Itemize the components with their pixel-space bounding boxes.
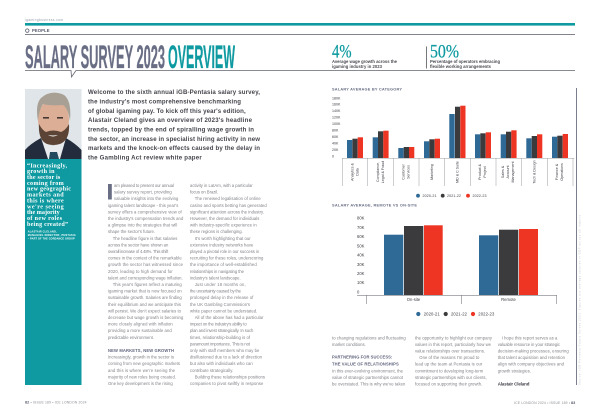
body text column 1: across the sector have shown an xyxy=(108,242,169,247)
y axis labels: 60K xyxy=(332,135,339,139)
body text column 1: their equilibrium and we anticipate this xyxy=(108,302,181,307)
intro paragraph: markets and the knock-on effects caused by the delay in xyxy=(88,145,260,152)
y axis labels: 50K xyxy=(357,243,365,248)
body text column 2: Just under 18 months on, xyxy=(195,282,246,287)
body text column 1: overall increase of 4.48%. This shift xyxy=(108,249,169,254)
y axis labels: 120K xyxy=(332,116,341,120)
y axis labels: 20K xyxy=(357,271,365,276)
stat: 50% flexible working xyxy=(426,42,500,69)
y axis labels: 180K xyxy=(332,96,341,100)
y axis labels xyxy=(357,215,365,294)
y axis labels: 0 xyxy=(357,290,360,294)
x axis labels: Remote xyxy=(501,297,516,302)
body text column 3: market conditions. xyxy=(332,342,366,347)
body text column 2: only with staff members who may be xyxy=(190,348,260,353)
stat: 4% wage growth: igaming industry in 2023 xyxy=(332,64,383,69)
footer: right folio: 83 xyxy=(571,401,575,405)
body text column 2: with industry-specific experience in xyxy=(190,223,257,228)
body text column 4: the opportunity to highlight our company xyxy=(415,335,493,340)
body text column 1: a glimpse into the strategies that will xyxy=(108,223,177,228)
title rule with speech-bubble notch xyxy=(25,70,575,77)
bars: on-site xyxy=(384,225,443,295)
category labels: Compliance, xyxy=(376,162,380,182)
legend xyxy=(416,194,486,198)
body text column 1: igaming market that is now focused on xyxy=(108,289,182,294)
y axis labels: 70K xyxy=(357,225,365,230)
body text column 2: played a pivotal role in our success in xyxy=(190,249,260,254)
body text column 1: providing a more sustainable and xyxy=(108,328,172,333)
body text column 5 with byline: that talent acquisition and retention xyxy=(498,355,566,360)
body text column 4: focused on supporting their growth. xyxy=(415,381,482,386)
stat: 50% flexible working: Percentage of operators embracing xyxy=(430,59,500,64)
body text column 1: sustainable growth. Salaries are finding xyxy=(108,295,182,300)
category labels: MD & C Suite xyxy=(456,161,460,183)
body text column 2: All of the above has had a particular xyxy=(195,315,264,320)
quote text: the majority xyxy=(27,210,60,216)
quote attribution xyxy=(28,231,76,240)
body text column 1: The headline figure is that salaries xyxy=(113,236,177,241)
body text column 3: be overstated. This is why we've taken xyxy=(332,381,406,386)
body text column 2: industry's talent landscape. xyxy=(190,275,241,280)
body text column 2: the uncertainty caused by the xyxy=(190,289,242,294)
body text column 2: extensive industry networks have xyxy=(190,242,254,247)
body text column 4 xyxy=(415,335,493,386)
y axis labels: 0 xyxy=(332,154,334,158)
chart title: SALARY AVERAGE BY CATEGORY xyxy=(332,86,402,92)
legend: 2020-21 xyxy=(422,194,436,198)
quote attribution: ALASTAIR CLELAND, xyxy=(28,231,57,234)
body text column 2: relationships in navigating the xyxy=(190,269,245,274)
body text column 1: salary survey report, providing xyxy=(114,190,172,195)
quote attribution: MANAGING DIRECTOR, PENTASIA xyxy=(28,234,76,237)
body text column 5 with byline: align with company objectives and xyxy=(498,362,565,367)
body text column 3: PARTNERING FOR SUCCESS: xyxy=(332,355,392,360)
body text column 2: It's worth highlighting that our xyxy=(195,236,251,241)
body text column 4: value relationships over transactions. xyxy=(415,348,485,354)
body text column 2: paramount importance. This is not xyxy=(190,341,251,346)
intro paragraph: the sector, an increase in specialist hiring activity in new xyxy=(88,136,260,143)
portrait photo xyxy=(25,89,82,159)
right margin rule xyxy=(575,88,578,385)
header: website, teal bar and section tag: PEOPLE xyxy=(32,28,50,33)
quote text: this is where xyxy=(27,198,64,204)
body text column 2: the importance of well-established xyxy=(190,262,257,267)
body text column 1: One key development is the rising xyxy=(108,381,173,386)
body text column 1: shape the sector's future. xyxy=(108,229,155,234)
chart title: SALARY AVERAGE, REMOTE VS ON-SITE xyxy=(332,202,417,208)
intro paragraph: the Gambling Act review white paper xyxy=(88,154,202,162)
chart: salary average by category xyxy=(332,86,574,198)
y axis labels: 140K xyxy=(332,109,341,113)
body text column 2: these regions is challenging. xyxy=(190,229,243,234)
body text column 1: the industry's compensation trends and xyxy=(108,216,184,221)
body text column 2: but also with individuals who can xyxy=(190,361,253,366)
legend xyxy=(416,312,495,316)
quote text: of new roles xyxy=(27,216,63,222)
category labels: Account xyxy=(506,166,510,178)
stat: 4% wage growth: 4% xyxy=(332,42,352,62)
y axis labels: 80K xyxy=(357,215,365,220)
body text column 4: strategic partnerships with our clients, xyxy=(415,375,487,380)
body text column 1: will persist. We don't expect salaries to xyxy=(108,308,182,313)
quote attribution: – PART OF THE CORDANCE GROUP xyxy=(28,237,75,240)
y axis labels: 40K xyxy=(332,141,339,145)
body text column 5 with byline: Alastair Cleland xyxy=(498,381,530,386)
body text column 1: Increasingly, growth in the sector is xyxy=(108,355,174,360)
body text column 1: valuable insights into the evolving xyxy=(114,196,179,201)
body text column 1: am pleased to present our annual xyxy=(114,183,174,188)
intro paragraph: trends, topped by the end of spiralling wage growth in xyxy=(88,126,254,134)
body text column 2: white paper cannot be understated. xyxy=(190,308,257,313)
category labels xyxy=(350,160,564,184)
x axis labels: On-site xyxy=(407,297,421,302)
quote text: new geographic xyxy=(27,187,71,193)
intro paragraph: the industry's most comprehensive benchmarking xyxy=(88,98,241,106)
body text column 1: comes in the context of the remarkable xyxy=(108,256,182,261)
body text column 1 xyxy=(108,183,184,386)
body text column 1: and this is where we're seeing the xyxy=(108,368,176,373)
panel: pull quote xyxy=(25,159,82,385)
quote text: the sector is xyxy=(27,175,61,181)
title xyxy=(25,39,235,75)
intro paragraph: of global igaming pay. To kick off this year's edition, xyxy=(88,108,246,115)
body text column 2: plan and invest strategically. In such xyxy=(190,328,254,333)
x axis and ticks xyxy=(342,158,574,186)
quote text xyxy=(27,163,71,228)
text: OVERVIEW xyxy=(168,39,235,75)
body text column 4: lead up the team at Pentasia is our xyxy=(415,362,483,367)
body text column 2: Building these relationships positions xyxy=(195,374,265,379)
quote text: we're seeing xyxy=(27,204,64,210)
y axis labels: 40K xyxy=(357,252,365,258)
body text column 2: casino and sports betting has generated xyxy=(190,203,267,208)
title: SALARY SURVEY 2023 xyxy=(25,39,165,75)
footer: left folio: • ISSUE 189 • ICE LONDON 2024 xyxy=(30,400,87,404)
drop cap I xyxy=(108,184,112,200)
category labels: Management xyxy=(511,162,515,182)
body text column 2: focus on Brazil. xyxy=(190,190,218,195)
body text column 3: value of strategic partnerships cannot xyxy=(332,375,404,380)
y axis labels: 80K xyxy=(332,128,339,132)
body text column 1: predictable environment. xyxy=(108,335,154,340)
category labels: Sales & xyxy=(501,165,505,178)
quote text: being created” xyxy=(27,222,68,228)
body text column 1: talent and corresponding wage inflation. xyxy=(108,275,183,280)
body text column 5 with byline: I hope this report serves as a xyxy=(502,335,558,340)
body text column 2: significant attention across the industry. xyxy=(190,209,264,214)
body text column 2: However, the demand for individuals xyxy=(190,216,259,221)
legend: 2022-23 xyxy=(472,194,486,198)
body text column 5 with byline xyxy=(498,335,569,386)
body text column 2: The renewed legalisation of online xyxy=(195,196,261,201)
body text column 3: THE VALUE OF RELATIONSHIPS xyxy=(332,361,399,366)
bars: remote xyxy=(479,229,538,295)
body text column 2: activity in LatAm, with a particular xyxy=(190,183,253,188)
quote text: coming from xyxy=(27,181,64,187)
y axis labels: 10K xyxy=(357,280,365,285)
category labels: Customer xyxy=(402,163,406,180)
body text column 1: igaming talent landscape - this year's xyxy=(108,203,178,208)
body text column 1: growth the sector has witnessed since xyxy=(108,262,184,267)
quote text: growth in xyxy=(27,169,55,175)
stat: 4% wage growth: Average wage growth across the xyxy=(332,59,398,64)
y axis labels: 30K xyxy=(357,262,365,267)
category labels: Analytics & xyxy=(350,163,354,181)
chart: salary average, remote vs on-site xyxy=(332,202,557,316)
stat: 4% wage growth xyxy=(332,42,398,69)
body text column 4: commitment to developing long-term xyxy=(415,368,484,373)
intro paragraph: Alastair Cleland gives an overview of 2023's headline xyxy=(88,117,253,124)
body text column 2: contribute strategically. xyxy=(190,368,233,373)
body text column 5 with byline: valuable resource in your strategic xyxy=(498,342,560,347)
body text column 2: prolonged delay in the release of xyxy=(190,295,254,300)
body text column 1: more closely aligned with inflation xyxy=(108,322,173,327)
category labels: Legal & Fraud xyxy=(381,161,385,183)
category labels: Data xyxy=(356,168,360,176)
body text column 1: majority of new roles being created. xyxy=(108,374,176,379)
body text column 1: survey offers a comprehensive view of xyxy=(108,209,183,214)
intro paragraph: Welcome to the sixth annual iGB-Pentasia salary survey, xyxy=(88,89,260,96)
category labels: Operations xyxy=(560,163,564,181)
category labels: Product & xyxy=(478,164,482,180)
body text column 4: One of the reasons I'm proud to xyxy=(419,355,480,360)
category labels: Tech & Design xyxy=(532,160,536,184)
quote text: markets and xyxy=(27,192,64,198)
x axis labels xyxy=(407,297,516,302)
legend: 2021-22 xyxy=(447,194,461,198)
legend: 2020-21 xyxy=(424,312,440,316)
body text column 3 xyxy=(332,335,406,386)
body text column 2 xyxy=(190,183,267,386)
x axis and ticks xyxy=(357,295,557,304)
body text column 3: In this ever-evolving environment, the xyxy=(332,368,404,373)
body text column 1: 2020, leading to high demand for xyxy=(108,269,173,274)
y axis labels: 60K xyxy=(357,234,365,239)
body text column 5 with byline: growth strategies. xyxy=(498,368,531,373)
category labels: Services xyxy=(406,165,410,179)
body text column 1: This year's figures reflect a maturing xyxy=(113,282,182,287)
vertical source note: Source: iGB-Pentasia Salary Survey 2023. Figures are average salaries in GBP across all regions xyxy=(578,214,582,385)
stat: 50% flexible working: flexible working arrangements xyxy=(430,64,492,69)
body text column 1: NEW MARKETS, NEW GROWTH xyxy=(108,348,174,353)
category labels: Marketing xyxy=(430,164,434,180)
body text column 2: the UK Gambling Commission's xyxy=(190,302,250,307)
quote text: “Increasingly, xyxy=(27,163,67,169)
footer: left folio: 82 xyxy=(25,400,29,404)
legend: 2021-22 xyxy=(451,312,468,316)
category labels: Project xyxy=(483,166,487,178)
body text column 2: times, relationship-building is of xyxy=(190,335,251,340)
header: website, teal bar and section tag: igamingbusiness.com xyxy=(25,18,63,22)
body text column 5 with byline: decision-making processes, ensuring xyxy=(498,348,569,354)
header: website, teal bar and section tag xyxy=(25,18,575,35)
body text column 1: coming from new geographic markets xyxy=(108,361,180,366)
body text column 4: values in this report, particularly how we xyxy=(415,342,492,347)
bars xyxy=(347,106,568,158)
body text column 3: to changing regulations and fluctuating xyxy=(332,335,406,340)
y axis labels: 160K xyxy=(332,103,341,107)
body text column 1: decrease but wage growth is becoming xyxy=(108,315,184,320)
y axis labels xyxy=(332,96,341,158)
category labels: Finance & xyxy=(555,163,559,180)
body text column 2: disillusioned due to a lack of direction xyxy=(190,355,263,360)
body text column 2: companies to pivot swiftly in response xyxy=(190,381,264,386)
stat: 50% flexible working: 50% xyxy=(430,42,459,62)
y axis labels: 100K xyxy=(332,122,341,126)
intro paragraph xyxy=(88,89,260,162)
body text column 2: recruiting for these roles, underscoring xyxy=(190,256,264,261)
y axis labels: 20K xyxy=(332,148,339,152)
legend: 2022-23 xyxy=(478,312,495,316)
footer: right folio: ICE LONDON 2024 • ISSUE 189 • xyxy=(514,401,571,405)
body text column 2: impact on the industry's ability to xyxy=(190,322,247,327)
